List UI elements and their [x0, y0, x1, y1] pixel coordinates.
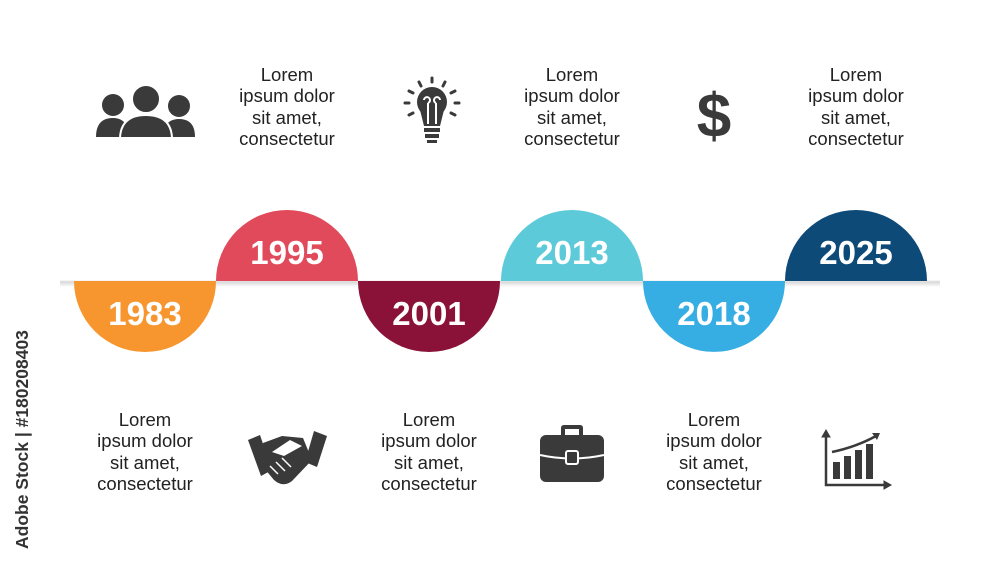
- text block top 1995: sit amet,: [252, 107, 322, 128]
- text block top 2013: [524, 64, 620, 149]
- milestone 1983: 1983: [108, 295, 182, 332]
- text block top 2013: sit amet,: [537, 107, 607, 128]
- milestone 1995: [216, 210, 358, 281]
- icon: light bulb: [405, 78, 459, 143]
- text block bottom 2001: consectetur: [381, 473, 477, 494]
- icon: people: [96, 85, 195, 138]
- text block bottom 2001: ipsum dolor: [381, 430, 477, 451]
- milestone 2018: 2018: [677, 295, 751, 332]
- text block bottom 1983: Lorem: [119, 409, 171, 430]
- milestone 2025: [785, 210, 927, 281]
- text block bottom 1983: consectetur: [97, 473, 193, 494]
- milestone 2025: 2025: [819, 234, 893, 271]
- milestone 2013: [501, 210, 643, 281]
- text block bottom 1983: ipsum dolor: [97, 430, 193, 451]
- text block top 2025: sit amet,: [821, 107, 891, 128]
- text block top 2025: Lorem: [830, 64, 882, 85]
- milestone 1983: [74, 281, 216, 352]
- text block top 2025: ipsum dolor: [808, 85, 904, 106]
- side credit text: Adobe Stock | #180208403: [12, 330, 32, 549]
- text block top 2025: [808, 64, 904, 149]
- text block top 1995: ipsum dolor: [239, 85, 335, 106]
- text block top 2013: consectetur: [524, 128, 620, 149]
- milestone 2001: 2001: [392, 295, 466, 332]
- text block bottom 2018: consectetur: [666, 473, 762, 494]
- milestone 2013: 2013: [535, 234, 609, 271]
- icon: handshake: [248, 431, 327, 484]
- text block bottom 1983: [97, 409, 193, 494]
- text block top 2013: ipsum dolor: [524, 85, 620, 106]
- icon: briefcase: [540, 425, 604, 482]
- text block top 1995: Lorem: [261, 64, 313, 85]
- text block bottom 1983: sit amet,: [110, 452, 180, 473]
- text block top 1995: consectetur: [239, 128, 335, 149]
- text block bottom 2018: sit amet,: [679, 452, 749, 473]
- text block bottom 2001: [381, 409, 477, 494]
- text block bottom 2001: Lorem: [403, 409, 455, 430]
- text block top 2013: Lorem: [546, 64, 598, 85]
- text block top 1995: [239, 64, 335, 149]
- text block top 2025: consectetur: [808, 128, 904, 149]
- timeline baseline: [60, 281, 940, 287]
- icon: dollar: $: [697, 82, 731, 151]
- text block bottom 2018: [666, 409, 762, 494]
- milestone 2001: [358, 281, 500, 352]
- icon: bar chart: [822, 430, 891, 489]
- text block bottom 2001: sit amet,: [394, 452, 464, 473]
- milestone 1995: 1995: [250, 234, 324, 271]
- milestone 2018: [643, 281, 785, 352]
- text block bottom 2018: Lorem: [688, 409, 740, 430]
- text block bottom 2018: ipsum dolor: [666, 430, 762, 451]
